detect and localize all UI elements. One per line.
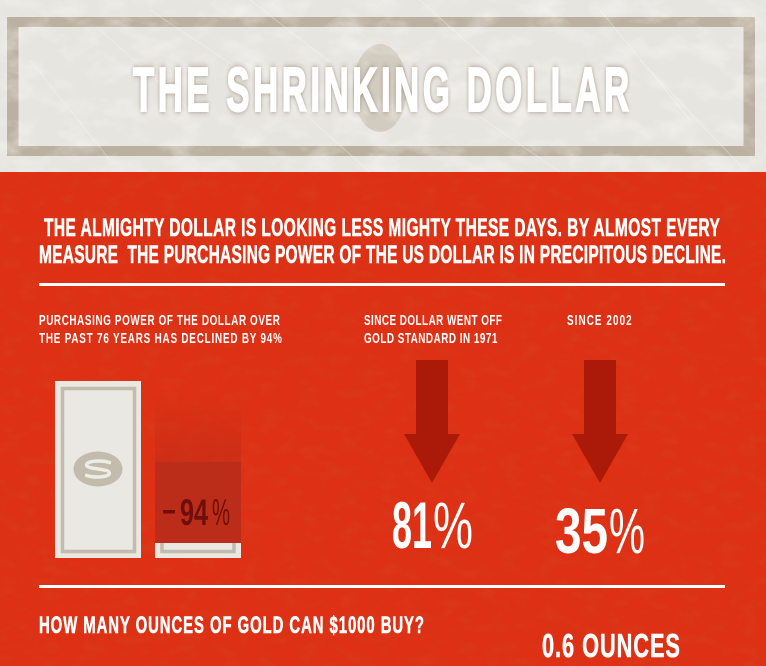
stat: 35 percent: 35 [555,495,608,567]
title: THE SHRINKING DOLLAR [133,55,629,125]
caption: since 2002: SINCE 2002 [567,312,632,329]
stat: 35 percent: % [609,495,645,567]
dollar symbol [87,461,109,477]
panel: paper header [0,0,766,172]
-94% label: 94 [180,492,208,533]
header oval [353,44,407,132]
intro text [39,214,726,269]
intro text: THE ALMIGHTY DOLLAR IS LOOKING LESS MIGHTY THESE DAYS. BY ALMOST EVERY [44,214,720,242]
chart: shrunken dollar bill [155,395,241,558]
caption: 76 year decline: PURCHASING POWER OF THE DOLLAR OVER [39,312,280,329]
arrow: 81 percent decline [404,360,460,483]
caption: since 1971 [364,312,502,347]
caption: 76 year decline: THE PAST 76 YEARS HAS DECLINED BY 94% [39,330,282,347]
panel: red background [0,172,766,666]
stat: 0.6 ounces: 0.6 OUNCES [542,627,680,664]
header frame [7,17,755,156]
title: THE SHRINKING DOLLAR [133,55,629,125]
stat: 81 percent: 81 [392,488,432,562]
intro text: MEASURE THE PURCHASING POWER OF THE US DOLLAR IS IN PRECIPITOUS DECLINE. [39,241,726,269]
arrow: 35 percent decline [572,360,628,483]
icon: full dollar bill [55,381,141,558]
heading: gold question: HOW MANY OUNCES OF GOLD CAN $1000 BUY? [39,613,424,639]
caption: 76 year decline [39,312,282,347]
caption: since 1971: GOLD STANDARD IN 1971 [364,330,497,347]
-94% label: % [212,492,230,533]
caption: since 1971: SINCE DOLLAR WENT OFF [364,312,502,329]
-94% label [163,492,230,533]
stat: 81 percent: % [433,488,473,562]
